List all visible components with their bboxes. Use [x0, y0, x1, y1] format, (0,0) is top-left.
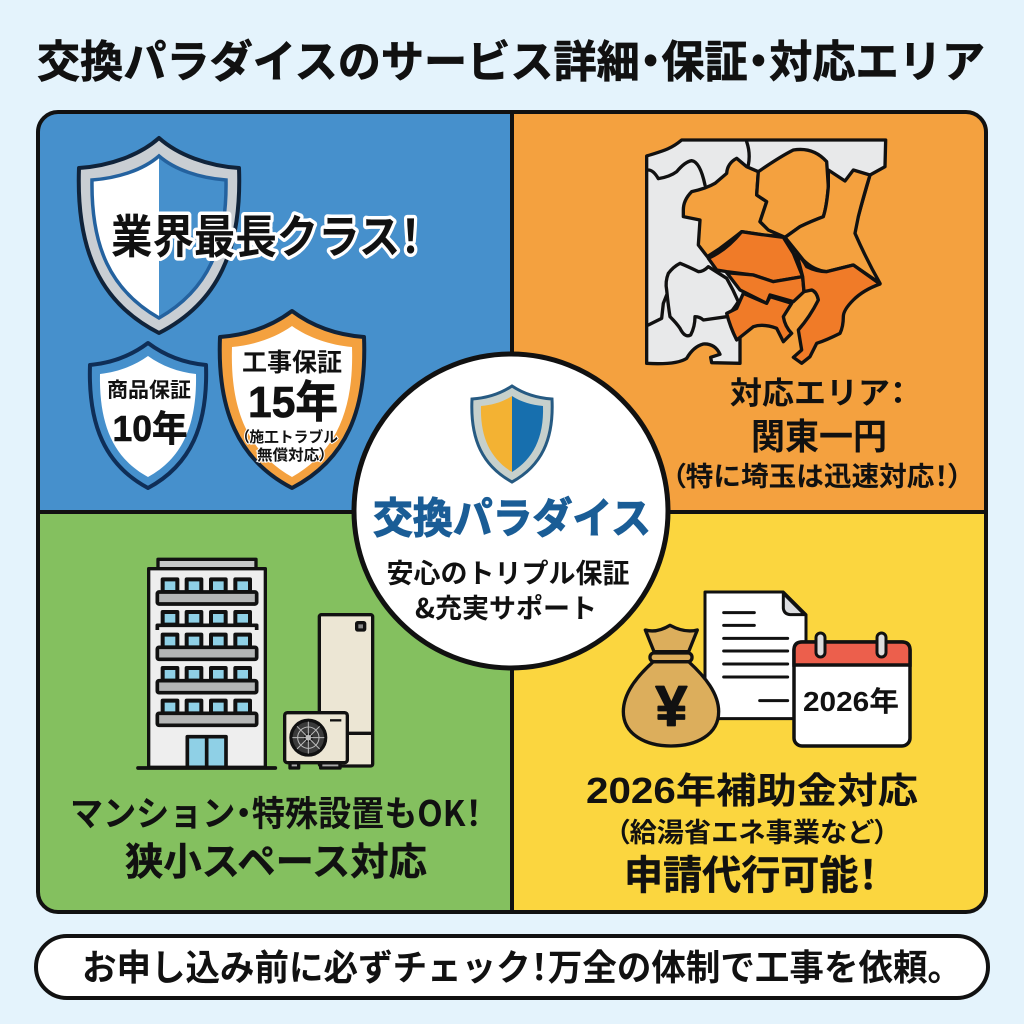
- text: service area: 対応エリア：: [730, 368, 906, 413]
- icon: yen money bag: ¥: [656, 676, 688, 739]
- logo text: 交換パラダイス: [373, 485, 651, 546]
- text: 2026 subsidy support: 2026年補助金対応: [586, 770, 918, 811]
- icon: large shield: [79, 138, 239, 333]
- title: 交換パラダイスのサービス詳細・保証・対応エリア: [37, 26, 985, 90]
- badge: product warranty 10 years: 商品保証: [107, 379, 191, 402]
- footer callout: お申し込み前に必ずチェック！万全の体制で工事を依頼。: [82, 939, 962, 991]
- text: all of Kanto: 関東一円: [751, 408, 887, 460]
- tagline second line: &充実サポート: [415, 587, 597, 626]
- icon: heat pump water heater: [285, 615, 373, 768]
- icon: calendar 2026: [794, 633, 910, 746]
- panel: subsidy (yellow): [512, 512, 986, 912]
- icon: logo shield: [472, 386, 552, 482]
- badge: construction warranty 15 years: （施工トラブル: [242, 428, 338, 446]
- center badge: [354, 354, 668, 668]
- text: Saitama note: （特に埼玉は迅速対応！）: [672, 455, 962, 494]
- icon: document: [705, 592, 806, 719]
- icon: yen money bag: [623, 625, 719, 746]
- icon: calendar 2026: 2026年: [803, 686, 899, 717]
- panel: warranty (blue): [38, 112, 512, 512]
- panel: service area (orange): [512, 112, 986, 512]
- panel: installation (green): [38, 512, 512, 912]
- badge: construction warranty 15 years: [220, 311, 364, 488]
- badge: product warranty 10 years: [90, 343, 206, 488]
- text: narrow space support: 狭小スペース対応: [125, 831, 427, 886]
- badge: construction warranty 15 years: 無償対応）: [257, 446, 327, 464]
- text: condos and special installs OK: マンション・特殊設置もOK！: [70, 786, 482, 837]
- badge: construction warranty 15 years: 工事保証: [242, 349, 342, 377]
- map: Kanto region: [647, 140, 886, 364]
- icon: apartment building: [138, 559, 275, 768]
- heading: industry-longest class: 業界最長クラス！: [111, 201, 421, 267]
- text: hot water energy-saving project: （給湯省エネ事業など）: [616, 811, 888, 850]
- badge: construction warranty 15 years: 15年: [248, 378, 338, 427]
- tagline: 安心のトリプル保証: [386, 552, 630, 591]
- quadrant frame: [38, 112, 986, 912]
- badge: product warranty 10 years: 10年: [112, 408, 188, 449]
- text: application on your behalf: 申請代行可能！: [624, 843, 878, 901]
